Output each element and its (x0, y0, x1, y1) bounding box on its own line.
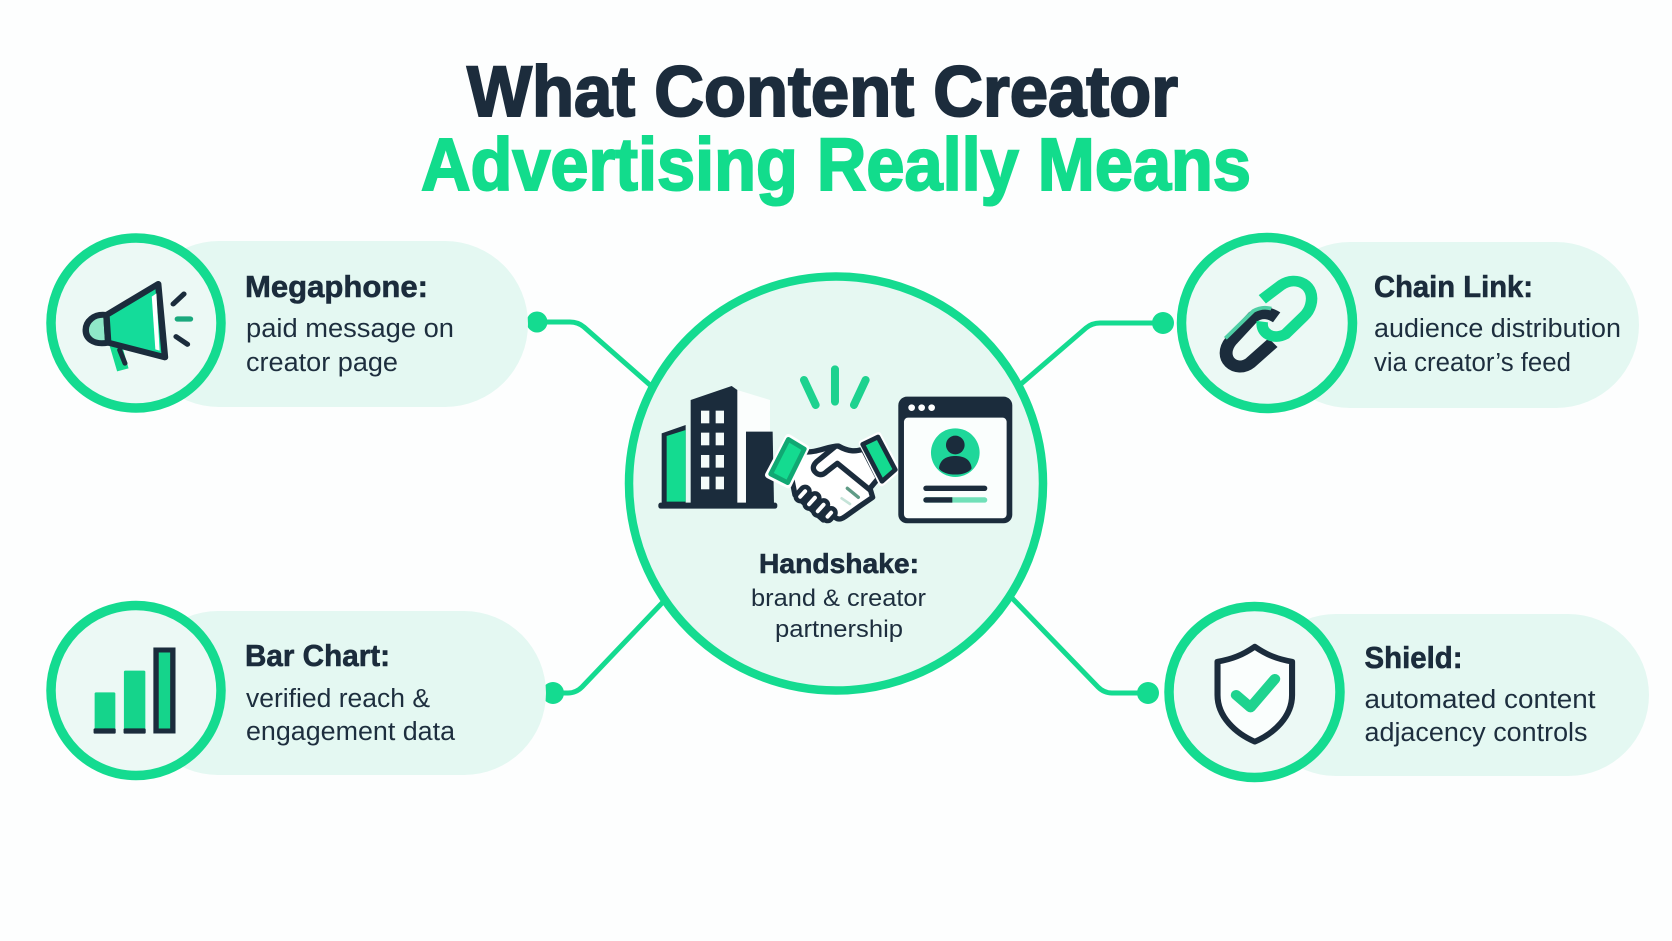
connector: shield to centre (1012, 598, 1159, 704)
icon: bar chart (94, 650, 173, 734)
text: chain link (1374, 269, 1621, 377)
connector: chain link to centre (1021, 312, 1174, 384)
text: chain link: via creator’s feed (1374, 349, 1571, 377)
text: handshake: partnership (775, 616, 903, 643)
icon: handshake (768, 435, 897, 523)
text: handshake: brand & creator (751, 585, 926, 612)
text: chain link: Chain Link: (1374, 269, 1533, 304)
text: megaphone (245, 269, 454, 377)
text: shield: automated content (1364, 686, 1596, 714)
text: bar chart: engagement data (246, 718, 456, 746)
text: bar chart: Bar Chart: (245, 638, 390, 673)
icon: sparks (804, 369, 866, 405)
icon: creator profile window (898, 397, 1012, 523)
text: bar chart: verified reach & (246, 685, 430, 713)
text: bar chart (245, 638, 456, 746)
title (421, 53, 1251, 206)
text: megaphone: creator page (246, 349, 398, 377)
icon: chain link (1225, 281, 1312, 366)
panel: chain link (1182, 238, 1639, 408)
text: handshake (751, 548, 926, 643)
icon: shield (1218, 647, 1292, 742)
text: shield: adjacency controls (1364, 719, 1588, 747)
icon: megaphone (86, 284, 190, 371)
panel: bar chart (51, 606, 546, 776)
text: shield: Shield: (1364, 640, 1462, 675)
title: What Content Creator (467, 53, 1178, 132)
panel: handshake centre (629, 276, 1043, 690)
connector: bar chart to centre (542, 602, 663, 704)
text: handshake: Handshake: (759, 548, 919, 579)
panel: shield (1169, 606, 1649, 778)
text: megaphone: Megaphone: (245, 269, 428, 304)
title: Advertising Really Means (421, 123, 1251, 206)
connector: megaphone to centre (526, 312, 650, 385)
text: shield (1364, 640, 1596, 747)
panel: megaphone (51, 238, 528, 408)
icon: brand building (658, 386, 777, 509)
text: chain link: audience distribution (1374, 315, 1621, 343)
text: megaphone: paid message on (246, 315, 454, 343)
